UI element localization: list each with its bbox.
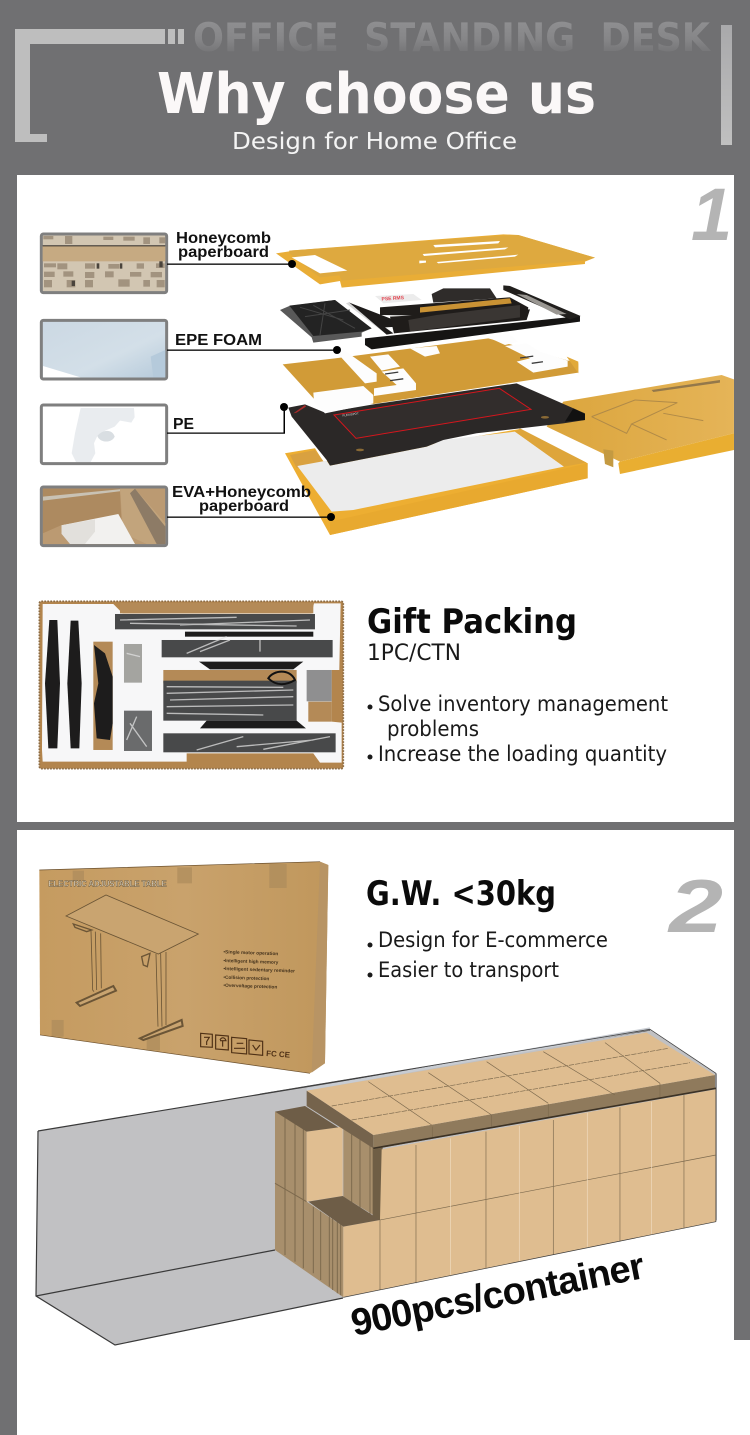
callout labels xyxy=(172,230,311,515)
panel: shipping xyxy=(17,830,734,1435)
desk line drawing xyxy=(66,895,198,1040)
bullet list xyxy=(368,692,668,766)
text: gross weight xyxy=(366,874,608,982)
middle tan board and foam xyxy=(283,332,578,413)
bullet list: Solve inventory management xyxy=(378,692,668,716)
container illustration xyxy=(36,1029,717,1345)
printed feature list xyxy=(223,949,295,990)
thumbnail: EVA plus honeycomb xyxy=(41,487,167,546)
text: gift packing xyxy=(367,602,668,766)
white lower right margin xyxy=(734,1340,750,1435)
container walls and floor xyxy=(36,1030,717,1345)
printed feature list: •Collision protection xyxy=(223,975,270,981)
bracket ticks xyxy=(168,29,184,44)
number 1: 1 xyxy=(691,173,732,256)
printed feature list: •Overvoltage protection xyxy=(223,983,278,990)
stacked cartons xyxy=(260,1029,716,1297)
printed feature list: •Single motor operation xyxy=(223,949,279,956)
parts in foam xyxy=(45,620,313,748)
dark steps xyxy=(275,1106,338,1132)
inner gap shadow xyxy=(373,1147,383,1221)
exploded packaging diagram xyxy=(276,234,734,535)
black desktop xyxy=(288,383,585,466)
leader lines and dots xyxy=(167,260,341,521)
top layer side xyxy=(307,1091,373,1148)
label: PE: PE xyxy=(173,416,194,433)
bullet list: Design for E-commerce xyxy=(378,928,608,952)
top honeycomb board xyxy=(276,234,595,288)
front face xyxy=(343,1089,716,1297)
side stripes xyxy=(275,1112,343,1297)
foam insert xyxy=(42,603,342,763)
bottom right assembled box xyxy=(547,375,734,474)
carton wells xyxy=(93,603,332,750)
thumbnail: honeycomb paperboard xyxy=(41,234,167,293)
bracket right xyxy=(721,25,732,145)
bracket left xyxy=(15,29,165,142)
bullet list: Easier to transport xyxy=(378,958,559,982)
thumbnail: PE xyxy=(41,405,167,464)
panel: packaging structure xyxy=(17,173,734,822)
thumbnail: EPE foam xyxy=(41,320,167,379)
title: Why choose us xyxy=(157,62,596,127)
bullet list: Increase the loading quantity xyxy=(378,742,667,766)
label: honeycomb: paperboard xyxy=(178,244,269,261)
frame and electronics xyxy=(280,285,581,349)
number 2: 2 xyxy=(666,864,723,948)
heading: Gift Packing xyxy=(367,602,577,642)
bullet list xyxy=(368,928,608,982)
header xyxy=(15,16,732,155)
subtitle: Design for Home Office xyxy=(232,129,517,155)
label: EVA honeycomb: EVA+Honeycomb xyxy=(172,484,311,501)
printed feature list: •Intelligent sedentary reminder xyxy=(223,966,295,973)
handling icons xyxy=(201,1033,263,1055)
printed feature list: •Intelligent high memory xyxy=(223,958,279,965)
capacity label: 900pcs/container xyxy=(348,1245,648,1345)
label: EVA honeycomb xyxy=(172,484,311,515)
photo: packed carton xyxy=(39,601,343,769)
header label: OFFICE STANDING DESK xyxy=(193,16,712,61)
quantity: 1PC/CTN xyxy=(367,640,461,666)
frame and electronics: PSE RMS xyxy=(381,295,405,303)
label: honeycomb: Honeycomb xyxy=(176,230,271,247)
label: honeycomb xyxy=(176,230,271,261)
printed title: ELECTRIC ADJUSTABLE TABLE xyxy=(48,879,167,889)
top face xyxy=(307,1033,715,1135)
black desktop: FLEXISPOT xyxy=(342,411,359,418)
bullet list: problems xyxy=(387,717,479,741)
carton box photo: FC CE xyxy=(266,1049,291,1060)
label: EVA honeycomb: paperboard xyxy=(199,498,289,515)
carton box photo xyxy=(39,862,328,1073)
bottom tray xyxy=(285,428,588,535)
label: EPE foam: EPE FOAM xyxy=(175,332,262,349)
carton seams xyxy=(332,1043,716,1290)
heading: G.W. <30kg xyxy=(366,874,556,914)
inset block xyxy=(307,1127,343,1202)
